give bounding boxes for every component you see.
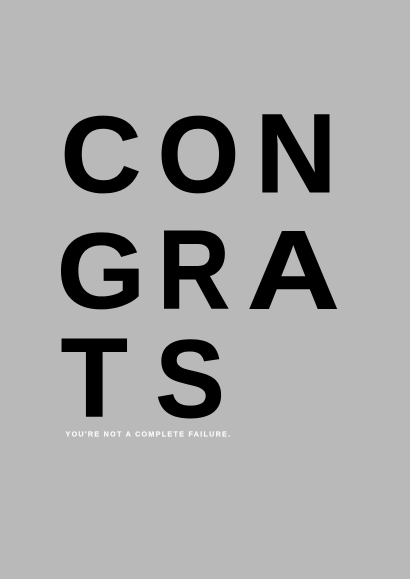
title line 1: CON: C bbox=[60, 94, 141, 216]
title line 3: TS: T bbox=[61, 317, 128, 441]
title line 1: CON: O bbox=[158, 93, 239, 215]
title line 3: TS: S bbox=[155, 317, 225, 441]
title line 2: GRA: G bbox=[57, 211, 145, 331]
title line 1: CON bbox=[60, 90, 337, 216]
title line 2: GRA bbox=[57, 207, 340, 333]
title line 2: GRA: A bbox=[247, 207, 340, 333]
title: CONGRATS bbox=[57, 90, 340, 441]
title line 2: GRA: R bbox=[158, 208, 230, 333]
title line 3: TS bbox=[61, 317, 225, 441]
tagline: YOU'RE NOT A COMPLETE FAILURE. bbox=[66, 430, 231, 438]
title line 1: CON: N bbox=[255, 90, 337, 216]
